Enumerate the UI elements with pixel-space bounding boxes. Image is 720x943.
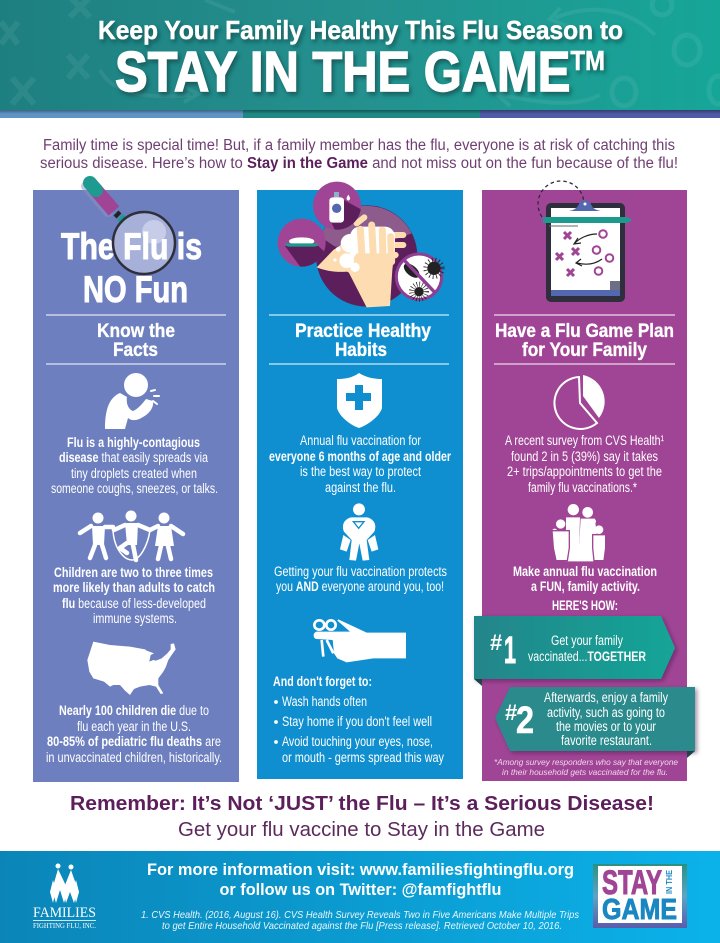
icon: map of the united states <box>87 642 176 695</box>
text: cvs survey: 2+ trips/appointments to get the <box>507 464 662 479</box>
title line 2: TM <box>570 45 605 76</box>
callout: step 2 ribbon: # <box>505 700 517 725</box>
text: protects everyone: Getting your flu vaccination protects <box>274 564 447 579</box>
heading: practice healthy habits <box>295 321 431 361</box>
text: children risk: more likely than adults to catch <box>53 580 215 595</box>
text: fun family activity: Make annual flu vaccination <box>513 564 657 579</box>
heading: have a flu game plan: Have a Flu Game Plan <box>495 321 674 342</box>
footnote: in their household gets vaccinated for the flu. <box>502 767 668 777</box>
icon: shield with cross <box>337 373 382 428</box>
icon: hand with ribbon on finger <box>314 619 406 662</box>
heading: have a flu game plan <box>495 321 674 361</box>
text: annual vaccination: against the flu. <box>325 480 396 495</box>
callout: step 1 ribbon: 1 <box>504 630 516 672</box>
footnote: *Among survey responders who say that everyone <box>494 757 678 767</box>
text: annual vaccination <box>269 433 452 495</box>
panel: practice healthy habits <box>257 182 463 779</box>
callout: step 1 ribbon: # <box>490 630 502 655</box>
intro paragraph <box>40 137 678 172</box>
text: annual vaccination: everyone 6 months of age and older <box>269 449 452 464</box>
text: pediatric deaths: flu each year in the U.S. <box>77 719 191 734</box>
text: children risk: immune systems. <box>93 611 177 626</box>
callout: step 2 ribbon: 2 <box>516 700 534 742</box>
icon: family group <box>552 504 606 561</box>
callout: step 1 ribbon: Get your family <box>551 633 623 648</box>
heading: know the facts: Facts <box>113 340 158 361</box>
heading: practice healthy habits: Habits <box>335 340 387 361</box>
callout: step 2 ribbon: Afterwards, enjoy a family <box>544 690 668 705</box>
icon: superhero <box>340 503 378 561</box>
logo: families fighting flu: FAMILIES <box>33 905 96 921</box>
text: cvs survey: found 2 in 5 (39%) say it takes <box>511 449 658 464</box>
illustration: hand washing <box>278 182 443 307</box>
footnote <box>494 757 678 777</box>
text: pediatric deaths: in unvaccinated children, historically. <box>46 750 222 765</box>
text: pediatric deaths: 80-85% of pediatric flu deaths are <box>47 734 221 749</box>
text: annual vaccination: Annual flu vaccination for <box>300 433 421 448</box>
logo: families fighting flu <box>33 864 96 930</box>
reference citation: to get Entire Household Vaccinated against the Flu [Press release]. Retrieved October 10, 2016. <box>162 920 562 932</box>
text: fun family activity: HERE'S HOW: <box>552 598 618 613</box>
title line 2: STAY IN THE GAME <box>115 40 646 104</box>
contact information: or follow us on Twitter: @famfightflu <box>220 880 502 899</box>
logo: stay in the game: IN THE <box>664 870 674 894</box>
callout: step 2 ribbon: activity, such as going to <box>547 705 665 720</box>
list: don't forget <box>273 674 444 765</box>
text: pediatric deaths <box>46 703 222 765</box>
reminder message: Get your flu vaccine to Stay in the Game <box>178 819 545 841</box>
icon: person coughing <box>105 373 159 429</box>
reminder message <box>70 793 654 841</box>
heading: the flu is no fun: NO Fun <box>83 269 188 310</box>
reference citation <box>141 909 580 932</box>
callout: step 1 ribbon: vaccinated...TOGETHER <box>528 649 646 664</box>
heading: the flu is no fun <box>61 226 202 310</box>
text: contagious: disease that easily spreads via <box>59 450 208 465</box>
header banner <box>0 0 720 118</box>
footer band <box>0 851 720 943</box>
text: cvs survey: family flu vaccinations.* <box>528 480 638 495</box>
logo: stay in the game: GAME <box>602 894 677 926</box>
text: fun family activity <box>513 564 657 613</box>
list: don't forget: Avoid touching your eyes, nose, <box>282 734 433 749</box>
panel: know the facts <box>33 183 239 782</box>
logo: families fighting flu: FIGHTING FLU, INC. <box>33 921 96 930</box>
callout: step 2 ribbon: the movies or to your <box>556 719 656 734</box>
icon: children jumping rope <box>80 510 183 560</box>
list: don't forget: Stay home if you don't feel well <box>282 714 432 729</box>
heading: the flu is no fun: The Flu is <box>61 226 202 267</box>
reference citation: 1. CVS Health. (2016, August 16). CVS Health Survey Reveals Two in Five Americans Make Multiple Trips <box>141 909 580 921</box>
text: contagious: someone coughs, sneezes, or talks. <box>51 481 218 496</box>
text: protects everyone: you AND everyone around you, too! <box>276 579 444 594</box>
heading: know the facts: Know the <box>97 321 175 342</box>
logo: stay in the game <box>593 864 687 928</box>
heading: know the facts <box>97 321 175 361</box>
text: fun family activity: a FUN, family activity. <box>531 579 640 594</box>
text: children risk <box>53 565 215 626</box>
logo: stay in the game: STAY <box>602 864 662 902</box>
list: don't forget: or mouth - germs spread this way <box>282 750 444 765</box>
intro paragraph: Family time is special time! But, if a family member has the flu, everyone is at risk of catching this <box>43 137 675 154</box>
text: pediatric deaths: Nearly 100 children die due to <box>59 703 209 718</box>
panel: flu game plan <box>474 181 695 781</box>
icon: clipboard with game plan <box>538 181 632 302</box>
lens ring <box>113 212 175 274</box>
contact information <box>147 860 574 899</box>
title line 1: Keep Your Family Healthy This Flu Season to <box>98 15 623 45</box>
intro paragraph: serious disease. Here’s how to Stay in the Game and not miss out on the fun because of the flu! <box>40 155 678 172</box>
text: children risk: Children are two to three times <box>54 565 213 580</box>
text: contagious: Flu is a highly-contagious <box>67 435 200 450</box>
text: protects everyone <box>274 564 447 594</box>
callout: step 1 ribbon <box>474 616 675 686</box>
contact information: For more information visit: www.familiesfightingflu.org <box>147 860 574 879</box>
playbook background marks <box>1 0 720 106</box>
reminder message: Remember: It’s Not ‘JUST’ the Flu – It’s a Serious Disease! <box>70 793 654 815</box>
text: children risk: flu because of less-developed <box>62 596 206 611</box>
text: cvs survey: A recent survey from CVS Health¹ <box>505 433 664 448</box>
heading: practice healthy habits: Practice Healthy <box>295 321 431 342</box>
colour strip <box>0 110 720 118</box>
callout: step 2 ribbon: favorite restaurant. <box>561 733 652 748</box>
text: contagious: tiny droplets created when <box>71 466 197 481</box>
text: annual vaccination: is the best way to protect <box>300 464 421 479</box>
heading: have a flu game plan: for Your Family <box>522 340 647 361</box>
icon: pie chart <box>554 375 605 429</box>
icon: magnifying glass lens <box>86 183 175 274</box>
text: contagious <box>51 435 218 496</box>
list: don't forget: And don't forget to: <box>273 674 372 689</box>
callout: step 2 ribbon <box>495 687 695 758</box>
list: don't forget: Wash hands often <box>282 694 367 709</box>
text: cvs survey <box>505 433 664 495</box>
